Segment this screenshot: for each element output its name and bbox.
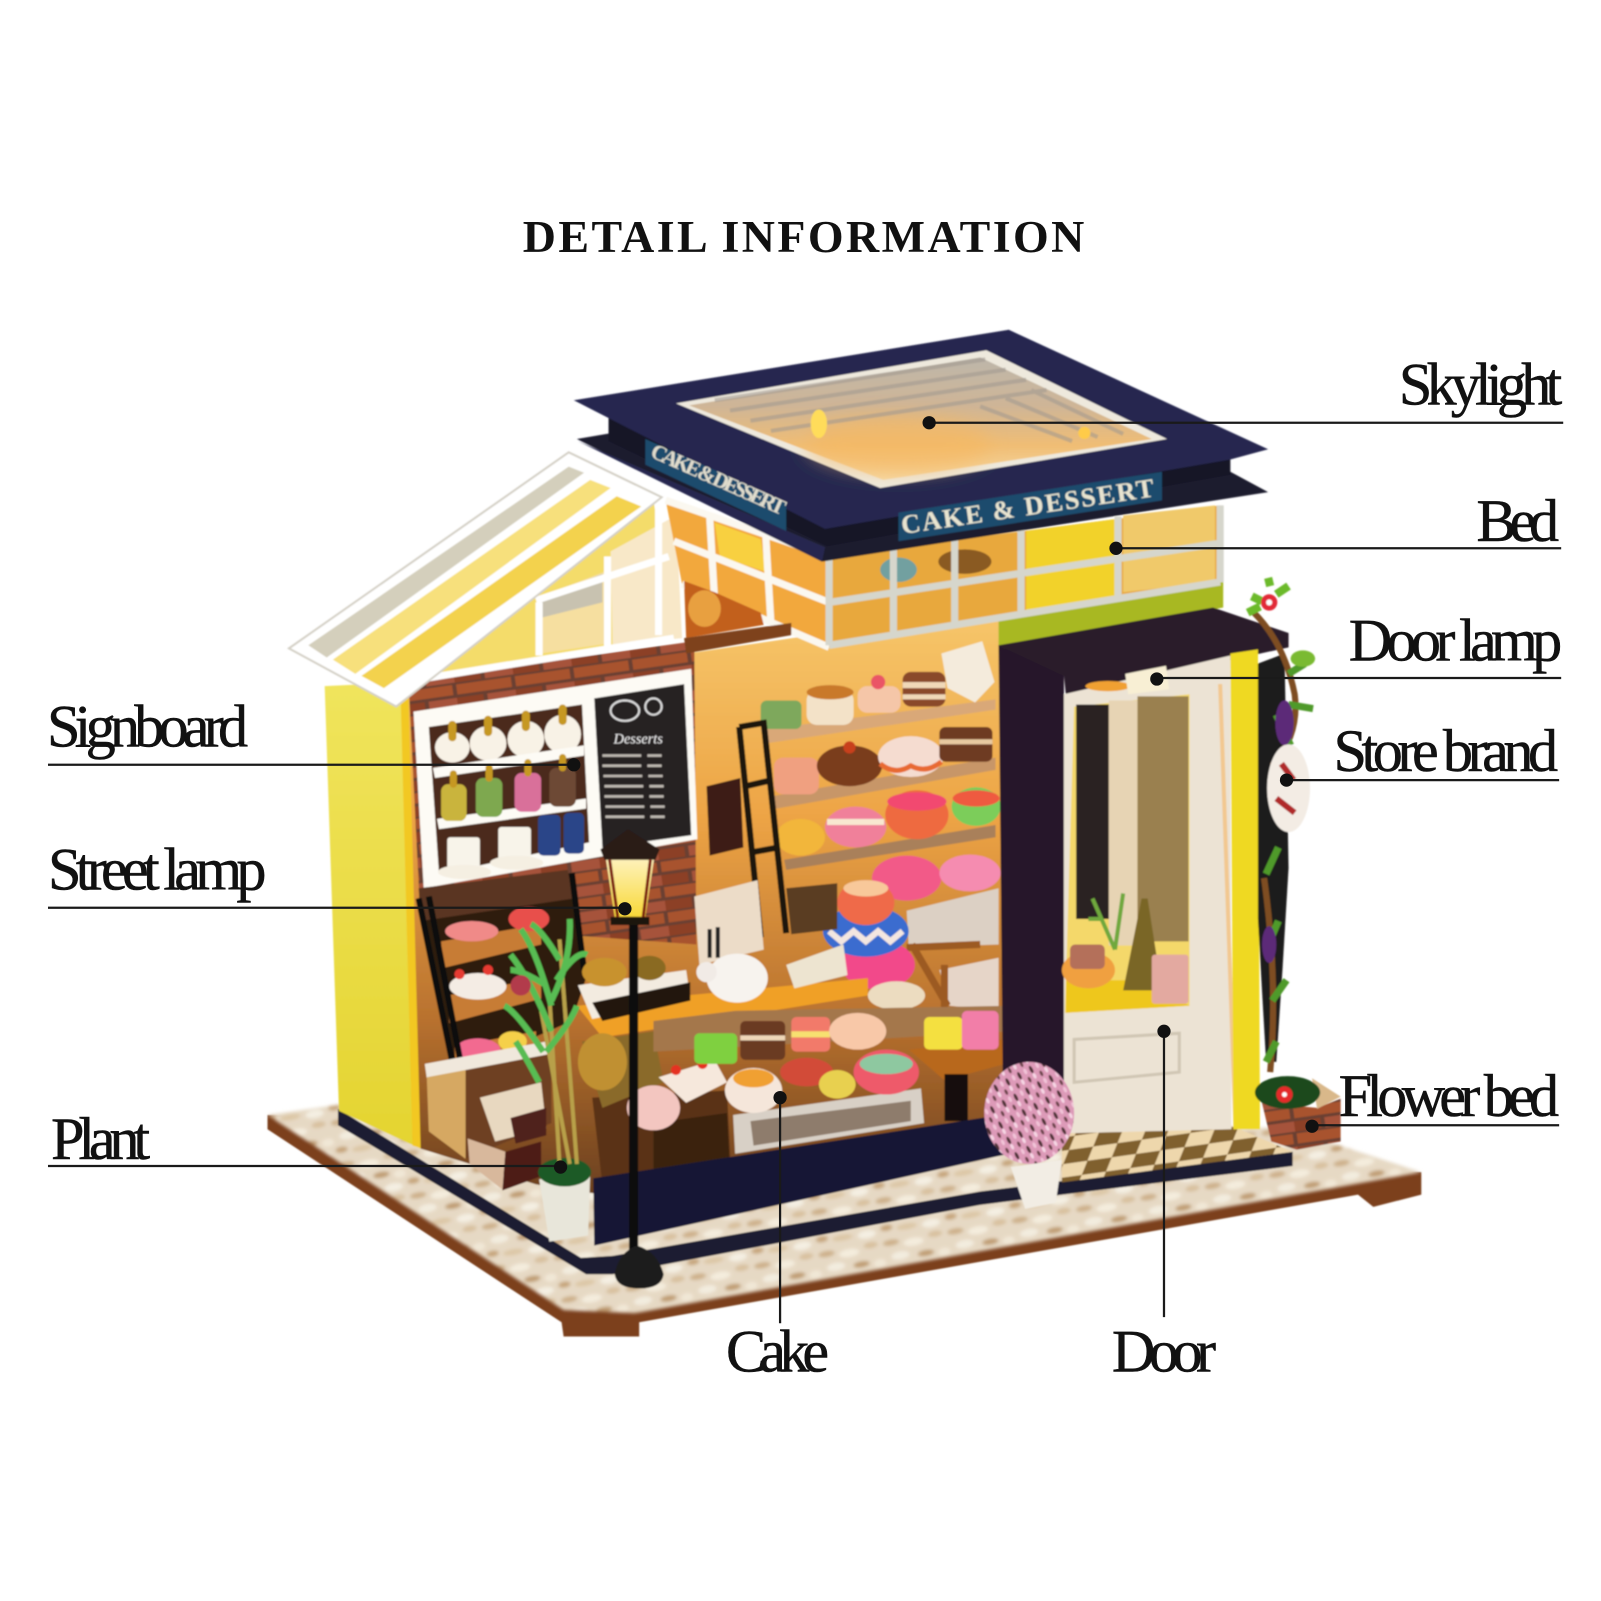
shelf bottom cakes xyxy=(776,787,1001,856)
store brand sign xyxy=(1267,744,1310,832)
shelf top cakes xyxy=(761,672,945,729)
street lamp xyxy=(600,829,664,1289)
yellow side wall xyxy=(325,682,423,1149)
label: Street lamp xyxy=(48,836,632,915)
right cake shelves xyxy=(761,641,1001,901)
glass gable roof xyxy=(289,452,662,707)
black ladder xyxy=(739,723,786,937)
label: Store brand: Store brand xyxy=(1333,718,1558,785)
label: Flower bed: Flower bed xyxy=(1339,1063,1559,1130)
front clerestory windows xyxy=(829,505,1220,647)
label: Bed: Bed xyxy=(1476,488,1559,555)
checker floor xyxy=(1062,1123,1293,1182)
base navy strip xyxy=(338,1109,1293,1274)
roof sign side: CAKE & DESSERT xyxy=(647,439,790,520)
door lamp xyxy=(1085,666,1169,694)
work table with tray xyxy=(577,944,868,1037)
door post and header xyxy=(999,608,1289,1082)
flower bed xyxy=(1255,1076,1341,1150)
title: DETAIL INFORMATION xyxy=(523,211,1084,262)
label: Plant: Plant xyxy=(51,1106,150,1173)
base platform xyxy=(268,1105,1421,1337)
plush whale xyxy=(696,954,768,1003)
label: Skylight: Skylight xyxy=(1399,351,1562,418)
jars second row xyxy=(441,758,576,821)
cups and blue jars xyxy=(438,813,584,879)
bottles top row xyxy=(435,709,581,763)
label: Signboard xyxy=(47,693,580,771)
navy front planter wall xyxy=(593,1115,1009,1246)
label: Cake xyxy=(726,1091,829,1385)
left pastry cabinet xyxy=(417,870,587,1159)
yellow-green fascia above door xyxy=(999,582,1223,653)
roof sign front: CAKE & DESSERT xyxy=(899,472,1156,540)
gift boxes by plant xyxy=(468,1082,546,1191)
yellow door jamb xyxy=(1230,649,1260,1129)
plant xyxy=(504,919,591,1242)
blackboard menu: Desserts xyxy=(613,731,663,747)
dollhouse illustration xyxy=(268,330,1421,1337)
label: Street lamp: Street lamp xyxy=(48,836,266,903)
skylight xyxy=(676,350,1167,488)
side clerestory windows xyxy=(666,500,829,647)
label: Skylight xyxy=(923,351,1563,429)
dark picture on back wall xyxy=(707,778,743,856)
gift box xyxy=(941,641,994,702)
label: Signboard: Signboard xyxy=(47,693,248,760)
roof xyxy=(574,330,1268,562)
wall picture and wood beam xyxy=(684,581,791,653)
label: Door lamp xyxy=(1150,608,1562,686)
brick wall xyxy=(408,641,696,944)
back boxes xyxy=(694,880,837,965)
climbing vine xyxy=(1248,578,1315,1072)
label: Door lamp: Door lamp xyxy=(1349,608,1562,675)
small side table xyxy=(909,1011,1013,1121)
blackboard menu xyxy=(594,684,691,847)
shelf middle cakes xyxy=(774,727,992,794)
tiered celebration cake xyxy=(823,880,925,1010)
display table of pastries xyxy=(578,1006,1011,1184)
pink topiary xyxy=(984,1062,1074,1209)
label: Cake: Cake xyxy=(726,1318,829,1385)
label: Plant xyxy=(48,1106,567,1174)
sofa xyxy=(907,888,999,1011)
signboard shelf xyxy=(414,669,697,888)
interior room xyxy=(408,613,1013,1195)
label: Door xyxy=(1112,1025,1216,1385)
lower pink cakes xyxy=(872,855,1001,901)
door xyxy=(1062,656,1235,1133)
label: Bed xyxy=(1109,488,1561,555)
gable window xyxy=(396,500,682,707)
label: Door: Door xyxy=(1112,1318,1216,1385)
door window view xyxy=(1062,696,1190,1013)
